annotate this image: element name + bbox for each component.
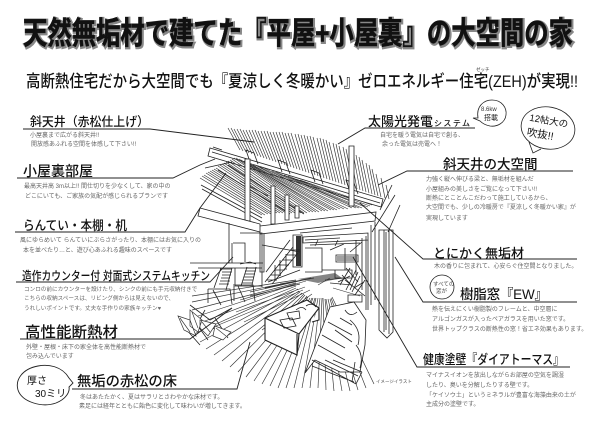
- subtitle: ゼッチ: [476, 66, 490, 72]
- panel: big slanted-ceiling space: 小屋組みの美しさをご覧になって下さい!!: [426, 185, 537, 193]
- panel: ranma, bookshelf, desk: 本を並べたり…と、遊び心あふれる趣味のスペースです: [23, 246, 172, 254]
- panel: attic room: [23, 163, 171, 200]
- title: 天然無垢材で建てた『平屋+小屋裏』の大空間の家: [23, 16, 573, 51]
- panel: kitchen: コンロの前にカウンターを設けたり、シンクの前にも手元収納付きで: [24, 285, 198, 293]
- panel: big slanted-ceiling space: [426, 157, 576, 222]
- attic rafters: [200, 158, 372, 215]
- stairs: [265, 240, 300, 284]
- panel: ranma, bookshelf, desk: 風にゆらめいて らんていにぶらさがったり、本棚にはお気に入りの: [20, 236, 201, 244]
- panel: big slanted-ceiling space: 大空間でも、少しの冷暖房で『夏涼しく冬暖かい家』が: [426, 203, 576, 211]
- counter: [190, 262, 263, 287]
- panel: insulation: [25, 324, 146, 360]
- panel: big slanted-ceiling space: 実現しています: [426, 214, 468, 222]
- panel: solar power: 自宅を暖う電気は自宅で創る、: [380, 131, 464, 139]
- floor boards: [192, 278, 374, 391]
- cross beams: [198, 208, 376, 243]
- panel: big slanted-ceiling space: 断熱にとことんこだわって施工しているから、: [426, 194, 552, 202]
- panel: resin window: 樹脂窓『EW』: [460, 286, 548, 302]
- panel: slanted ceiling: [30, 114, 149, 148]
- leader lines: [15, 128, 577, 389]
- panel: insulation: 高性能断熱材: [25, 324, 118, 341]
- posts: [245, 146, 354, 272]
- panel: kitchen: こちらの収納スペースは、リビング側からは見えないので、: [24, 294, 174, 302]
- panel: diatomaceous wall: 主成分の塗壁です。: [426, 400, 479, 408]
- panel: slanted ceiling: 斜天井（赤松仕上げ）: [30, 114, 149, 129]
- panel: solid wood: [433, 246, 577, 270]
- callout: all windows: [430, 275, 454, 299]
- panel: attic room: 小屋裏部屋: [23, 163, 93, 179]
- panel: big slanted-ceiling space: 力強く縦へ伸びる梁と、無垢材を組んだ: [426, 175, 534, 183]
- callout: 12 tatami atrium: 12帖大の: [528, 112, 569, 130]
- image caption: イメージイラスト: [376, 379, 412, 385]
- panel: pine floor: [77, 373, 246, 410]
- plants: [185, 268, 365, 345]
- panel: attic room: どこにいても、ご家族の気配が感じられるプランです: [25, 192, 168, 200]
- panel: diatomaceous wall: 「ケイソウ土」というミネラルが豊富な海藻由来の土が: [426, 391, 576, 399]
- panel: insulation: 包み込んでいます: [26, 352, 74, 360]
- panel: solar power: システム: [434, 119, 470, 128]
- interior illustration: [178, 128, 400, 391]
- coffee table: [265, 300, 319, 355]
- sofa: [305, 302, 366, 373]
- panel: slanted ceiling: 開放感あふれる空間を体感して下さい!!: [31, 140, 136, 148]
- panel: diatomaceous wall: 健康塗壁『ダイアトーマス』: [423, 352, 564, 367]
- panel: attic room: 最高天井高 3m以上!! 間仕切りを少なくして、家の中の: [24, 182, 171, 190]
- panel: diatomaceous wall: したり、臭いを分解したりする壁です。: [426, 381, 533, 389]
- panel: resin window: 世界トップクラスの断熱性の窓！省エネ効果もあります。: [432, 325, 587, 333]
- title: 天然無垢材で建てた『平屋+小屋裏』の大空間の家: [24, 17, 574, 52]
- panel: resin window: 熱を伝えにくい樹脂製のフレームと、中空層に: [432, 305, 557, 313]
- panel: kitchen: [22, 268, 210, 312]
- callout: 8.6kW: [473, 100, 506, 126]
- panel: solid wood: 木の香りに包まれて、心安らぐ住空間となりました。: [434, 262, 577, 270]
- panel: resin window: [432, 286, 587, 333]
- callout: 8.6kW: 8.6kw: [481, 107, 497, 113]
- window column: [379, 230, 393, 338]
- callout: 30mm thick: 30ミリ: [35, 389, 66, 400]
- walls and room: [229, 223, 366, 310]
- panel: ranma, bookshelf, desk: らんてい・本棚・机: [23, 218, 127, 233]
- panel: solar power: [368, 114, 470, 148]
- panel: kitchen: 造作カウンター付 対面式システムキッチン: [22, 268, 210, 283]
- callout: 8.6kW: 搭載: [484, 113, 498, 122]
- panel: resin window: アルゴンガスが入ったペアガラスを用いた窓です。: [432, 315, 569, 323]
- panel: kitchen: うれしいポイントです。丈夫な手作りの家族キッチン♥: [24, 304, 162, 312]
- callout: 12 tatami atrium: 吹抜!!: [526, 126, 555, 143]
- panel: ranma, bookshelf, desk: [20, 218, 201, 254]
- panel: solar power: 余った電気は売電へ！: [382, 140, 442, 148]
- panel: solid wood: とにかく無垢材: [433, 246, 524, 261]
- callout: all windows: 窓が: [436, 287, 448, 295]
- callout: all windows: すべての: [433, 281, 454, 288]
- callout: 30mm thick: 厚さ: [27, 375, 47, 387]
- panel: diatomaceous wall: マイナスイオンを放出しながらお部屋の空気を調湿: [426, 371, 564, 379]
- panel: pine floor: 無垢の赤松の床: [77, 373, 177, 389]
- callout: 30mm thick: [17, 365, 73, 405]
- callout: 12 tatami atrium: [518, 103, 578, 153]
- panel: insulation: 外壁・屋根・床下の家全体を高性能断熱材で: [26, 343, 146, 351]
- panel: pine floor: 素足には経年とともに飴色に変化して味わいが増してきます。: [79, 402, 246, 410]
- panel: big slanted-ceiling space: 斜天井の大空間: [443, 157, 538, 172]
- panel: solar power: 太陽光発電: [368, 114, 433, 129]
- panel: slanted ceiling: 小屋裏まで広がる斜天井!!: [30, 131, 100, 139]
- panel: diatomaceous wall: [423, 352, 576, 408]
- ridge beam: [208, 148, 383, 207]
- panel: pine floor: 冬はあたたかく、夏はサラリとさわやかな床材です。: [80, 393, 223, 401]
- ceiling rafters: [228, 128, 389, 199]
- chairs: [208, 267, 257, 305]
